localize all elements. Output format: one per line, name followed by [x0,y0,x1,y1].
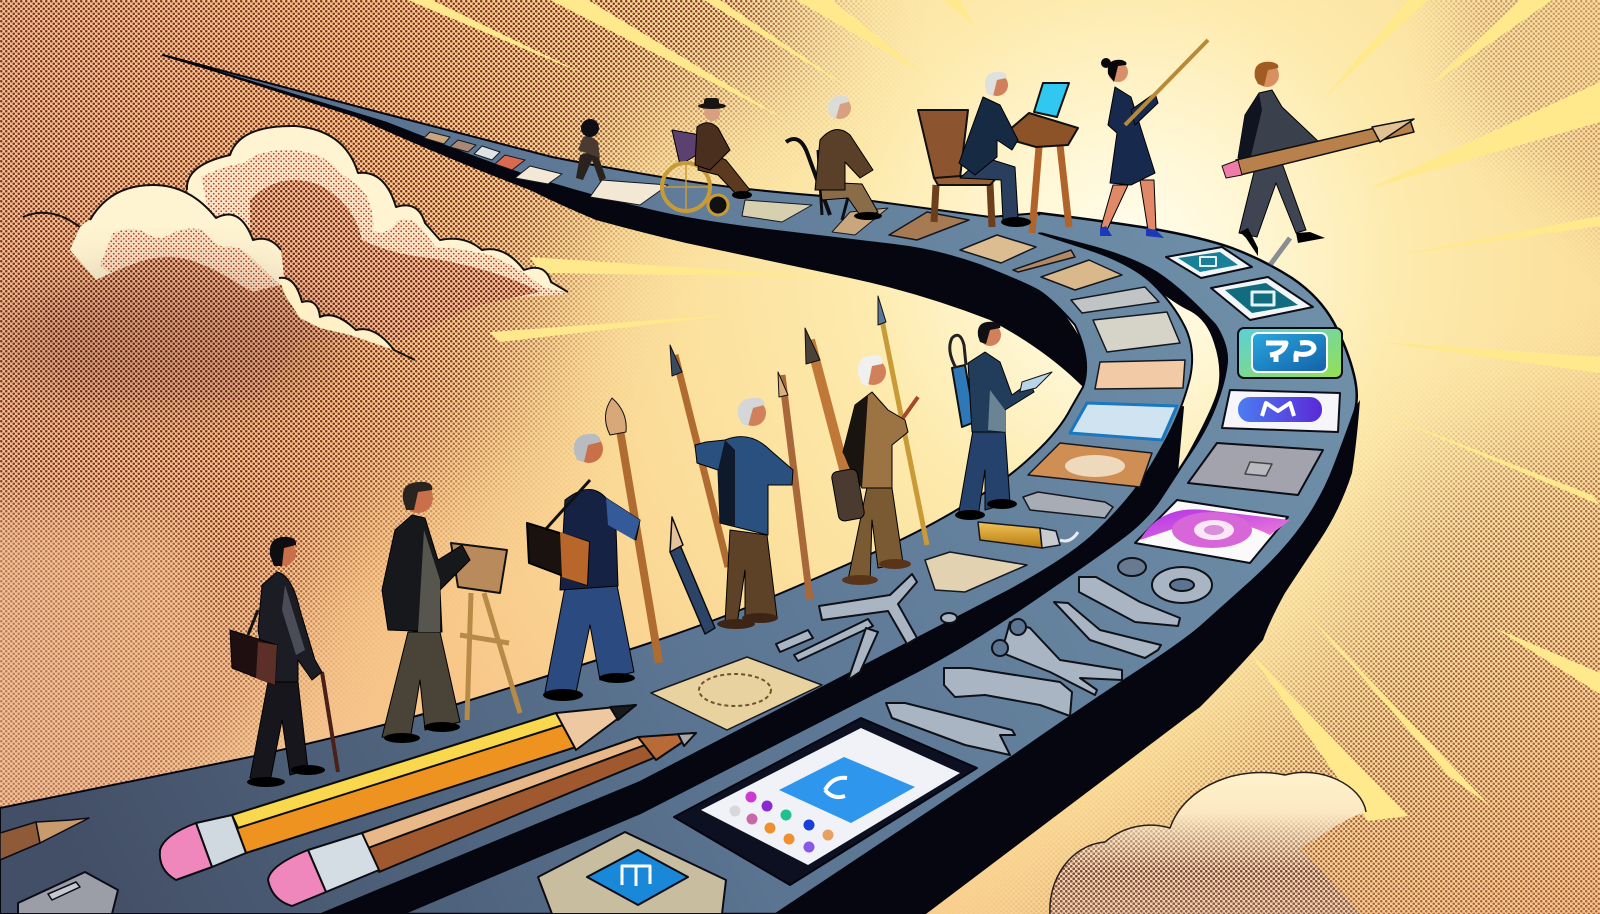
black pencil [670,517,715,634]
folded paper map [925,552,1027,592]
cloud: lower right [1050,772,1366,914]
seated man [960,157,1018,220]
wooden board [889,212,969,240]
cloud: upper left [0,126,568,410]
peach sketch card [1095,360,1185,389]
rear cloud shaded core [250,180,540,340]
icon: dark teal tile [1211,277,1313,320]
sun rays [408,0,1600,821]
blue screen card [1070,403,1177,440]
person: small distant child [576,119,606,182]
adjustable wrench [944,668,1072,716]
laptop [1034,83,1069,117]
grey tile, bottom left [18,872,118,914]
outer lane: app icons [1135,247,1342,563]
cloud outlines [23,126,568,360]
scissors pliers [995,622,1122,695]
large brown pencil [268,733,696,906]
person: man with quiver and tablet [950,322,1052,520]
metal plate [1071,287,1159,313]
person: man at desk with laptop [918,72,1078,233]
pliers [1054,602,1161,658]
wrench [1079,577,1180,626]
person: elder in wheelchair [662,98,752,215]
drafting sheet [1093,312,1180,352]
chip device [538,832,726,914]
easel [460,593,520,720]
icon: teal tile [1166,247,1252,278]
front cloud shaded core [0,257,340,410]
inner lane: parchment tiles and tools [651,212,1185,730]
writing desk [1032,145,1069,233]
front cloud lit interior [100,229,280,295]
small fold tools [819,574,917,644]
road: black underside of outer lane [776,400,1360,914]
large parchment [651,657,822,730]
parchment map [960,235,1036,263]
person: seated elder with cane [786,96,882,220]
icon: cyan app tile [1238,328,1342,378]
tan circuit board [1028,443,1152,487]
ring and coil [1118,558,1146,576]
person: traveller with tall brush [527,398,659,701]
road: black inner band of outer lane [1039,233,1228,473]
road: lane divider [321,407,1183,914]
road: inner lane underside [163,55,1092,387]
locking pliers [886,703,1015,755]
road: outer lane surface [402,213,1357,914]
person: man with two staffs [670,345,810,629]
lower cloud rim [279,278,394,350]
ruler stick [1013,250,1075,272]
rear cloud billow [187,126,568,292]
icon: purple swirl tile [1135,500,1290,563]
parchment blueprint [1041,260,1122,290]
paint tube [978,522,1042,548]
rear cloud lit interior [201,150,568,330]
person: man in brown suit with spears [805,296,927,585]
person: woman with pencil [1100,40,1208,238]
chair [934,183,992,227]
person: traveller with briefcase and cane [230,537,338,787]
road: inner lane surface [0,55,1192,914]
icon: grey tile [1188,443,1323,495]
person: painter with easel [382,482,520,743]
small brown pencil [0,818,89,860]
large yellow pencil [160,705,636,880]
icon: blue M tile [1222,390,1340,432]
tools: pliers and wrenches [776,558,1212,755]
person: walker with large pencil [1222,62,1414,265]
keyboard [1023,492,1113,518]
tablet [674,718,977,885]
front cloud billow [70,185,285,285]
tiles: distant road strip [424,132,888,235]
